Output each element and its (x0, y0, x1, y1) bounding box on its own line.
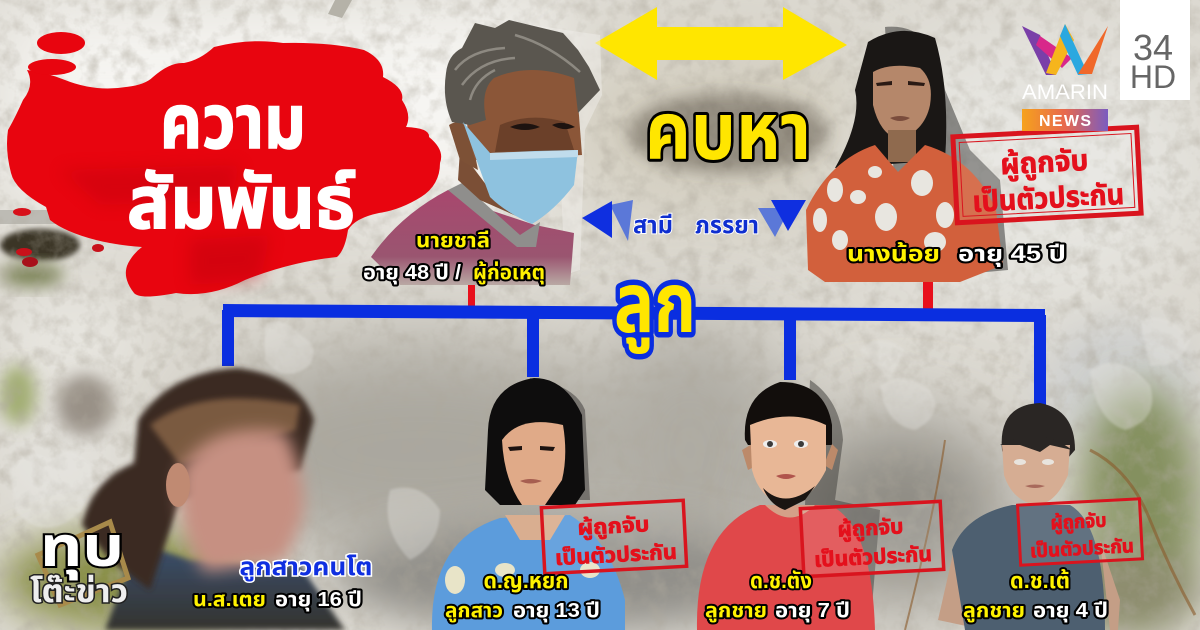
heading: คบหา: คบหา (645, 87, 811, 176)
label: daughter: อายุ 13 ปี (513, 600, 600, 622)
label: eldest daughter (193, 553, 372, 611)
polka dot shirt (806, 145, 1003, 282)
title: ความสัมพันธ์: ความ (160, 80, 306, 165)
stamp: son 4 (1018, 499, 1143, 565)
label: eldest daughter: อายุ 16 ปี (275, 589, 362, 611)
neck (458, 150, 530, 222)
stamp: mother: ผู้ถูกจับ (1000, 145, 1089, 182)
connector lines (222, 262, 1046, 405)
stamp: daughter (541, 500, 687, 574)
stamp: son 7: เป็นตัวประกัน (813, 543, 933, 572)
relation labels: สามี ภรรยา: สามี (633, 212, 673, 239)
stamp: mother (953, 127, 1141, 223)
stamp: mother: เป็นตัวประกัน (972, 179, 1125, 219)
label: son 4 (963, 568, 1108, 622)
white blotches (10, 318, 1190, 560)
label: mother: อายุ 45 ปี (958, 241, 1066, 267)
title: ความสัมพันธ์ (127, 80, 355, 244)
label: son 7: อายุ 7 ปี (775, 600, 850, 622)
label: son 4: อายุ 4 ปี (1033, 600, 1108, 622)
figure: daughter ด.ญ.หยก (432, 378, 625, 630)
face (873, 66, 931, 140)
label: mother: นางน้อย (847, 241, 940, 266)
W emblem (1022, 24, 1108, 75)
label: father: อายุ 48 ปี / (363, 262, 461, 284)
title: ความสัมพันธ์: สัมพันธ์ (127, 161, 355, 244)
label: father (363, 230, 545, 284)
heading: ลูก: ลูก (614, 256, 696, 354)
logo: Amarin 34 HD News (1022, 0, 1190, 131)
label: son 4: ด.ช.เต้ (1010, 568, 1070, 593)
stamp: daughter: ผู้ถูกจับ (577, 513, 650, 541)
face mask (463, 122, 578, 224)
stamp: son 7 (800, 501, 944, 577)
yellow double arrow (595, 7, 847, 80)
red paint splash (7, 32, 441, 296)
figure: eldest daughter (blurred) (82, 368, 345, 630)
stamp: son 4: ผู้ถูกจับ (1050, 510, 1107, 535)
ear (449, 122, 478, 170)
label: father: ผู้ก่อเหตุ (473, 262, 545, 284)
label: son 7 (705, 568, 850, 622)
stamp: son 4: เป็นตัวประกัน (1029, 535, 1134, 563)
logo: ทุบโต๊ะข่าว: โต๊ะข่าว (30, 573, 128, 609)
logo: ทุบโต๊ะข่าว (30, 515, 128, 609)
figure: son ด.ช.เต้ (938, 403, 1120, 630)
label: son 7: ลูกชาย (705, 600, 767, 622)
shadow (885, 27, 1008, 280)
collar (448, 183, 540, 247)
stamp: daughter: เป็นตัวประกัน (554, 541, 677, 570)
label: father: นายชาลี (416, 230, 490, 252)
shirt (371, 190, 574, 285)
label: eldest daughter: ลูกสาวคนโต (240, 553, 372, 582)
channel number: 34 (1133, 27, 1173, 68)
logo: Amarin 34 HD News: HD (1130, 59, 1176, 95)
hair (835, 31, 946, 168)
stamp: son 7: ผู้ถูกจับ (837, 515, 904, 543)
logo: Amarin 34 HD News: NEWS (1039, 113, 1091, 130)
torn paper shadow (485, 18, 602, 275)
figure: son ด.ช.ตัง (697, 380, 880, 630)
label: son 4: ลูกชาย (963, 600, 1025, 622)
label: daughter (445, 568, 600, 622)
relation labels: สามี ภรรยา (582, 200, 806, 241)
figure: father (371, 18, 602, 285)
face (466, 70, 582, 160)
wordmark: AMARIN (1022, 81, 1108, 104)
logo: ทุบโต๊ะข่าว: ทุบ (40, 515, 124, 581)
label: daughter: ด.ญ.หยก (484, 568, 568, 593)
white channel box (1120, 0, 1190, 100)
figure: mother (806, 27, 1008, 282)
label: eldest daughter: น.ส.เตย (193, 589, 266, 611)
relation labels: สามี ภรรยา: ภรรยา (695, 212, 759, 239)
news badge (1022, 109, 1108, 131)
hair (445, 20, 600, 125)
label: daughter: ลูกสาว (445, 600, 503, 622)
label: mother (847, 241, 1066, 267)
label: son 7: ด.ช.ตัง (750, 568, 812, 593)
